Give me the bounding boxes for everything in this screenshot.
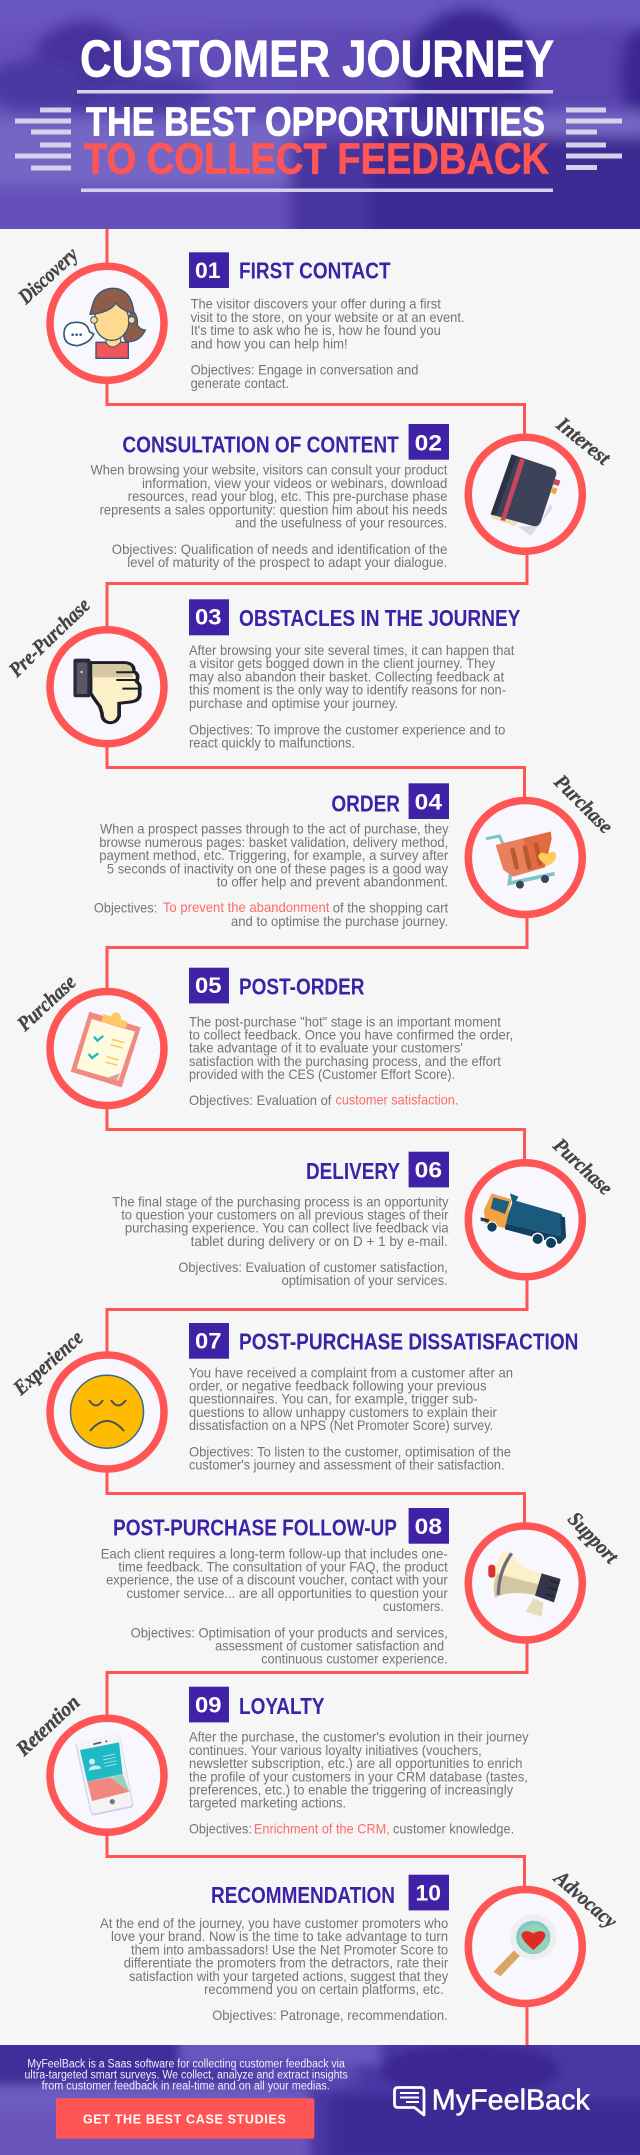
body text: a visitor gets bogged down in the client journey. They xyxy=(189,655,495,671)
body text: customer satisfaction. xyxy=(336,1092,458,1108)
icon: woman with speech bubble xyxy=(64,288,145,358)
right speed bars xyxy=(566,108,622,170)
body text: level of maturity of the prospect to adapt your dialogue. xyxy=(127,554,447,570)
body text: It's time to ask who he is, how he found you xyxy=(191,322,441,338)
body text: react quickly to malfunctions. xyxy=(189,734,355,750)
body text: and how you can help him! xyxy=(191,335,348,351)
number box xyxy=(189,968,229,1003)
body text: Objectives: Evaluation of customer satisfaction, xyxy=(178,1259,448,1275)
body text: Enrichment of the CRM, xyxy=(254,1820,390,1836)
heading: RECOMMENDATION xyxy=(211,1882,395,1908)
body text: The visitor discovers your offer during a first xyxy=(191,296,441,312)
body text: When a prospect passes through to the act of purchase, they xyxy=(100,821,449,837)
body text: When browsing your website, visitors can consult your product xyxy=(91,462,447,478)
number: 04 xyxy=(415,789,443,814)
body text: tablet during delivery or on D + 1 by e-mail. xyxy=(191,1233,448,1249)
body text: Objectives: Optimisation of your products and services, xyxy=(131,1624,448,1640)
stage label: purchase: Purchase xyxy=(549,769,618,838)
body text: differentiate the promoters from the detractors, rate their xyxy=(124,1955,449,1971)
icon: notebook xyxy=(491,454,560,536)
body text: satisfaction with the purchasing process, and the effort xyxy=(189,1053,501,1069)
section 10 recommendation xyxy=(100,1864,623,2023)
section 09 loyalty xyxy=(10,1687,529,1837)
header photo background xyxy=(0,0,640,252)
body text: take advantage of it to evaluate your customers' xyxy=(189,1040,463,1056)
body text: Objectives: Engage in conversation and xyxy=(191,362,418,378)
body text: The final stage of the purchasing process is an opportunity xyxy=(112,1193,448,1209)
body text: At the end of the journey, you have customer promoters who xyxy=(100,1915,448,1931)
company description: ultra-targeted smart surveys. We collect, analyze and extract insights xyxy=(24,2070,348,2082)
number: 10 xyxy=(416,1881,441,1906)
body text: satisfaction with your targeted actions, suggest that they xyxy=(129,1968,448,1984)
body text xyxy=(100,1915,449,2023)
body text: To prevent the abandonment xyxy=(163,899,329,915)
subtitle: to collect feedback: TO COLLECT FEEDBACK xyxy=(84,136,550,184)
icon: clipboard checklist xyxy=(71,1012,141,1087)
body text xyxy=(91,462,448,570)
body text: time feedback. The consultation of your FAQ, the product xyxy=(118,1558,448,1574)
company description: from customer feedback in real-time and on all your medias. xyxy=(42,2080,330,2092)
body text: order, or negative feedback following your previous xyxy=(189,1378,487,1394)
body text: customers. xyxy=(383,1598,444,1614)
body text: Objectives: Evaluation of xyxy=(189,1092,331,1108)
body text: and the usefulness of your resources. xyxy=(235,515,447,531)
number box xyxy=(189,599,229,635)
rule under subtitle xyxy=(81,188,553,192)
number box xyxy=(189,1687,229,1722)
stage label: pre-purchase: Pre-Purchase xyxy=(3,593,95,682)
stage circle xyxy=(50,1718,164,1832)
body text: them into ambassadors! Use the Net Promoter Score to xyxy=(131,1941,448,1957)
call to action button: GET THE BEST CASE STUDIES xyxy=(83,2112,286,2126)
number: 07 xyxy=(195,1329,222,1354)
section 06 delivery xyxy=(112,1133,618,1288)
body text: provided with the CES (Customer Effort Score). xyxy=(189,1066,455,1082)
body text: purchasing experience. You can collect live feedback via xyxy=(125,1220,449,1236)
body text: You have received a complaint from a customer after an xyxy=(189,1364,513,1380)
body text: continues. Your various loyalty initiatives (vouchers, xyxy=(189,1742,482,1758)
body text xyxy=(101,1545,448,1667)
icon: sad face xyxy=(70,1375,144,1448)
stage circle xyxy=(468,1890,582,2004)
body text: newsletter subscription, etc.) are all opportunities to enrich xyxy=(189,1755,522,1771)
stage label: purchase: Purchase xyxy=(548,1133,618,1200)
body text xyxy=(191,296,464,391)
section 04 order xyxy=(94,769,618,929)
number: 03 xyxy=(195,605,222,630)
body text: preferences, etc.) to enable the triggering of increasingly xyxy=(189,1782,513,1798)
body text: generate contact. xyxy=(191,375,289,391)
body text: 5 seconds of inactivity on one of these pages is a good way xyxy=(107,860,448,876)
stage label: support: Support xyxy=(563,1507,624,1569)
body text: assessment of customer satisfaction and xyxy=(215,1638,444,1654)
section 08 post-purchase follow-up xyxy=(101,1507,624,1667)
section 01 first contact xyxy=(13,242,464,391)
stage circle xyxy=(468,800,582,914)
body text: information, view your videos or webinars, download xyxy=(142,475,447,491)
body text: love your brand. Now is the time to take advantage to turn xyxy=(111,1928,448,1944)
body text: to collect feedback. Once you have confirmed the order, xyxy=(189,1026,513,1042)
body text: continuous customer experience. xyxy=(261,1651,448,1667)
body text: Objectives: xyxy=(94,900,157,916)
body text: visit to the store, on your website or at an event. xyxy=(191,309,464,325)
number: 02 xyxy=(415,430,442,455)
number box xyxy=(409,1875,449,1910)
body text xyxy=(189,1729,529,1837)
body text: The post-purchase "hot" stage is an important moment xyxy=(189,1013,501,1029)
heading: POST-PURCHASE DISSATISFACTION xyxy=(239,1328,578,1354)
icon: megaphone xyxy=(488,1551,561,1617)
icon: smartphone xyxy=(75,1733,133,1815)
body text: experience, the use of a discount voucher, contact with your xyxy=(106,1572,448,1588)
heading: LOYALTY xyxy=(239,1693,324,1719)
stage circle xyxy=(50,992,164,1106)
stage circle xyxy=(50,630,164,744)
stage circle xyxy=(468,437,582,551)
body text: dissatisfaction on a NPS (Net Promoter Score) survey. xyxy=(189,1417,493,1433)
number box xyxy=(189,252,229,288)
icon: thumbs down xyxy=(73,659,140,723)
body text: questions to allow unhappy customers to explain their xyxy=(189,1404,497,1420)
number box xyxy=(409,1152,449,1187)
body text: Each client requires a long-term follow-up that includes one- xyxy=(101,1545,448,1561)
number: 01 xyxy=(195,258,220,283)
body text: optimisation of your services. xyxy=(282,1272,448,1288)
call to action button xyxy=(56,2098,314,2139)
heading: ORDER xyxy=(331,790,400,816)
subtitle: the best opportunities: THE BEST OPPORTUNITIES xyxy=(86,98,545,144)
body text: Objectives: To improve the customer experience and to xyxy=(189,721,505,737)
stage circle xyxy=(50,1355,164,1469)
section 07 post-purchase dissatisfaction xyxy=(8,1323,578,1472)
journey connector line xyxy=(107,229,527,2045)
body text: customer service... are all opportunities to question your xyxy=(126,1585,448,1601)
number: 09 xyxy=(195,1693,222,1718)
stage circle xyxy=(468,1526,582,1640)
icon: dump truck xyxy=(481,1193,566,1249)
body text: Objectives: Qualification of needs and identification of the xyxy=(112,541,447,557)
body text: customer knowledge. xyxy=(393,1821,514,1837)
rule under title xyxy=(77,90,553,94)
number box xyxy=(409,424,449,460)
body text xyxy=(189,642,514,750)
body text: purchase and optimise your journey. xyxy=(189,695,398,711)
left speed bars xyxy=(15,108,71,170)
stage circle xyxy=(50,266,164,380)
stage label: experience: Experience xyxy=(8,1325,88,1400)
title: customer journey: CUSTOMER JOURNEY xyxy=(80,30,554,88)
number box xyxy=(189,1323,229,1359)
body text: may also abandon their basket. Collecting feedback at xyxy=(189,668,504,684)
body text xyxy=(94,821,449,929)
heading: FIRST CONTACT xyxy=(239,258,391,284)
icon: shopping cart xyxy=(486,832,556,889)
body text: Objectives: To listen to the customer, optimisation of the xyxy=(189,1443,511,1459)
number: 05 xyxy=(195,973,222,998)
section 03 obstacles in the journey xyxy=(3,593,520,750)
body text: targeted marketing actions. xyxy=(189,1795,346,1811)
header banner xyxy=(0,0,640,252)
body text: Objectives: Patronage, recommendation. xyxy=(212,2007,448,2023)
number: 08 xyxy=(415,1514,442,1539)
body text: questionnaires. You can, for example, trigger sub- xyxy=(189,1391,478,1407)
icon: magnifying glass with heart xyxy=(497,1915,557,1974)
number box xyxy=(409,783,449,819)
heading: POST-ORDER xyxy=(239,974,365,1000)
company description xyxy=(24,2059,348,2092)
heading: OBSTACLES IN THE JOURNEY xyxy=(239,605,520,631)
body text: Objectives: xyxy=(189,1821,252,1837)
body text xyxy=(189,1013,513,1108)
stage label: interest: Interest xyxy=(551,411,616,470)
number: 06 xyxy=(415,1158,442,1183)
body text: customer's journey and assessment of their satisfaction. xyxy=(189,1456,504,1472)
stage label: discovery: Discovery xyxy=(13,242,83,309)
heading: DELIVERY xyxy=(306,1158,400,1184)
body text xyxy=(112,1193,449,1288)
body text: of the shopping cart xyxy=(333,900,448,916)
section 05 post-order xyxy=(11,968,513,1108)
stage label: purchase: Purchase xyxy=(11,970,81,1036)
logo: myfeelback: MyFeelBack xyxy=(432,2084,590,2116)
section 02 consultation of content xyxy=(91,411,616,570)
footer photo background xyxy=(0,2045,640,2155)
body text: resources, read your blog, etc. This pre-purchase phase xyxy=(128,488,448,504)
company description: MyFeelBack is a Saas software for collecting customer feedback via xyxy=(27,2059,345,2071)
body text: After browsing your site several times, it can happen that xyxy=(189,642,514,658)
footer banner xyxy=(0,2045,640,2155)
stage circle xyxy=(468,1163,582,1277)
body text: browse numerous pages: basket validation, delivery method, xyxy=(99,834,448,850)
stage label: retention: Retention xyxy=(10,1690,84,1761)
body text: represents a sales opportunity: question him about his needs xyxy=(100,501,447,517)
body text: recommend you on certain platforms, etc. xyxy=(204,1981,444,1997)
stage label: advocacy: Advocacy xyxy=(548,1864,623,1933)
heading: POST-PURCHASE FOLLOW-UP xyxy=(113,1514,397,1540)
body text: payment method, etc. Triggering, for example, a survey after xyxy=(99,847,449,863)
number box xyxy=(409,1508,449,1544)
body text xyxy=(189,1364,513,1472)
body text: and to optimise the purchase journey. xyxy=(231,913,448,929)
body text: After the purchase, the customer's evolution in their journey xyxy=(189,1729,529,1745)
body text: the profile of your customers in your CRM database (tastes, xyxy=(189,1768,528,1784)
body text: this moment is the only way to identify reasons for non- xyxy=(189,682,506,698)
body text: to offer help and prevent abandonment. xyxy=(217,873,448,889)
heading: CONSULTATION OF CONTENT xyxy=(122,432,399,458)
body text: to question your customers on all previous stages of their xyxy=(121,1206,449,1222)
